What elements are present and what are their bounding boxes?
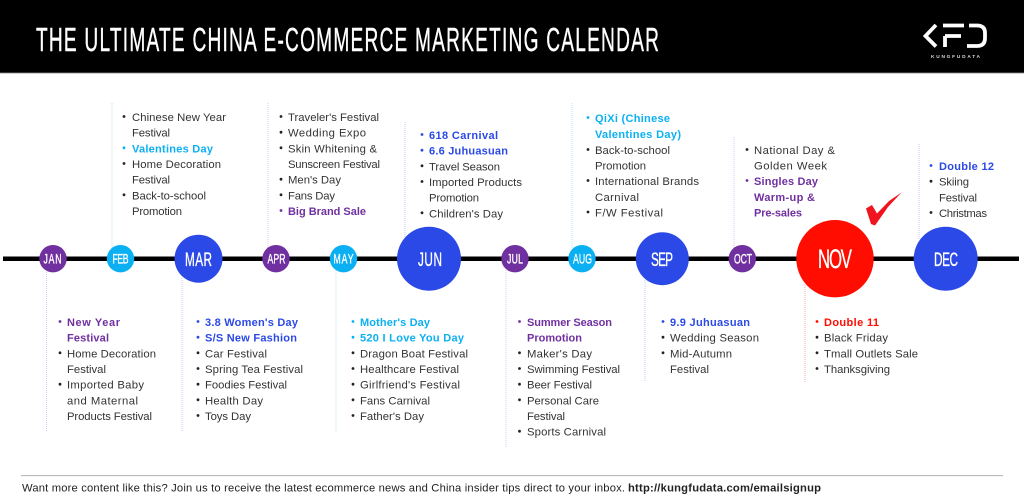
panel: July events	[506, 270, 620, 448]
panel: September events	[645, 280, 759, 382]
panel: December events: Christmas	[939, 208, 987, 220]
month marker: JUL: JUL	[507, 251, 523, 267]
panel: February events: Home Decoration	[132, 159, 221, 171]
month marker: NOV	[796, 220, 874, 297]
panel: February events: Valentines Day	[132, 143, 214, 155]
panel: January events: Festival	[67, 333, 109, 345]
panel: October events: Warm-up &	[754, 192, 815, 204]
panel: November events	[805, 285, 918, 382]
panel: March events: Health Day	[205, 395, 263, 407]
month marker: JAN: JAN	[44, 251, 61, 267]
month marker: APR	[262, 245, 290, 272]
panel: March events: Foodies Festival	[205, 380, 287, 392]
panel: December events: Festival	[939, 192, 977, 204]
panel: April events: Skin Whitening &	[288, 143, 377, 155]
panel: November events: Black Friday	[824, 333, 888, 345]
panel: August events: Back-to-school	[595, 145, 670, 157]
panel: March events: Toys Day	[205, 411, 251, 423]
panel: September events: Festival	[670, 364, 709, 376]
panel: June events: Imported Products	[429, 177, 522, 189]
panel: February events: Festival	[132, 128, 170, 140]
panel: December events: Double 12	[939, 161, 994, 173]
panel: March events: 3.8 Women's Day	[205, 317, 299, 329]
logo: KFD Kungfudata	[926, 25, 985, 60]
title: THE ULTIMATE CHINA E-COMMERCE MARKETING CALENDAR	[36, 22, 659, 58]
month marker: NOV: NOV	[818, 244, 852, 274]
logo: KFD Kungfudata: KUNGFUDATA	[931, 54, 981, 60]
panel: February events: Chinese New Year	[132, 112, 226, 124]
panel: May events: Fans Carnival	[360, 395, 430, 407]
panel: August events	[572, 103, 699, 248]
panel: May events: Mother's Day	[360, 317, 431, 329]
panel: July events: Swimming Festival	[527, 364, 620, 376]
panel: December events: Skiing	[939, 177, 969, 189]
month marker: AUG: AUG	[573, 251, 592, 267]
icon: red check mark	[866, 192, 902, 226]
panel: May events: Father's Day	[360, 411, 424, 423]
month marker: JAN	[39, 245, 67, 272]
panel: August events: International Brands	[595, 176, 699, 188]
panel: August events: Valentines Day)	[595, 129, 681, 141]
panel: June events: Promotion	[429, 193, 479, 205]
panel: July events: Beer Festival	[527, 380, 592, 392]
panel: August events: QiXi (Chinese	[595, 113, 670, 125]
panel: June events: 618 Carnival	[429, 130, 498, 142]
panel: July events: Summer Season	[527, 317, 612, 329]
timeline axis	[3, 256, 1019, 261]
panel: April events: Wedding Expo	[288, 128, 366, 140]
month marker: OCT	[729, 245, 756, 272]
panel: January events: and Maternal	[67, 395, 138, 407]
month marker: OCT: OCT	[734, 251, 752, 267]
panel: January events: Products Festival	[67, 411, 152, 423]
panel: March events	[182, 278, 303, 432]
month marker: APR: APR	[268, 251, 285, 267]
panel: April events: Fans Day	[288, 190, 335, 202]
panel: November events: Thanksgiving	[824, 364, 890, 376]
panel: March events: S/S New Fashion	[205, 333, 297, 345]
month marker: SEP	[636, 232, 689, 285]
panel: March events: Spring Tea Festival	[205, 364, 303, 376]
panel: May events	[336, 270, 468, 432]
panel: May events: Girlfriend's Festival	[360, 380, 460, 392]
footer call to action: http://kungfudata.com/emailsignup	[628, 483, 821, 495]
month marker: MAR: MAR	[185, 250, 212, 271]
panel: May events: Dragon Boat Festival	[360, 348, 468, 360]
panel: May events: Healthcare Festival	[360, 364, 459, 376]
month marker: AUG	[568, 245, 596, 272]
panel: September events: Wedding Season	[670, 333, 759, 345]
month marker: FEB: FEB	[113, 251, 129, 267]
panel: January events: Festival	[67, 364, 106, 376]
panel: June events: Children's Day	[429, 208, 503, 220]
panel: May events: 520 I Love You Day	[360, 333, 465, 345]
panel: July events: Sports Carnival	[527, 427, 606, 439]
panel: January events: New Year	[67, 317, 121, 329]
panel: February events: Promotion	[132, 206, 182, 218]
panel: July events: Promotion	[527, 333, 582, 345]
panel: July events: Personal Care	[527, 395, 599, 407]
month marker: DEC	[914, 227, 978, 291]
panel: February events: Back-to-school	[132, 190, 206, 202]
month marker: SEP: SEP	[651, 250, 673, 271]
panel: April events: Traveler's Festival	[288, 112, 379, 124]
panel: January events	[46, 272, 156, 432]
panel: July events: Maker's Day	[527, 348, 592, 360]
panel: July events: Festival	[527, 411, 565, 423]
footer divider	[21, 474, 1003, 477]
panel: August events: Carnival	[595, 192, 639, 204]
month marker: JUN	[397, 227, 461, 291]
month marker: MAY	[330, 245, 357, 272]
panel: September events: Mid-Autumn	[670, 348, 732, 360]
panel: October events: Singles Day	[754, 176, 819, 188]
panel: April events: Men's Day	[288, 175, 341, 187]
panel: September events: 9.9 Juhuasuan	[670, 317, 750, 329]
panel: April events: Sunscreen Festival	[288, 159, 380, 171]
month marker: DEC: DEC	[934, 250, 958, 271]
panel: June events: Travel Season	[429, 161, 500, 173]
panel: June events	[405, 122, 522, 240]
panel: October events	[734, 137, 835, 248]
panel: April events: Big Brand Sale	[288, 206, 366, 218]
panel: October events: National Day &	[754, 145, 835, 157]
month marker: JUN: JUN	[418, 250, 442, 271]
panel: December events	[919, 144, 994, 240]
panel: April events	[268, 103, 380, 248]
panel: October events: Golden Week	[754, 160, 827, 172]
month marker: FEB	[107, 245, 134, 272]
panel: October events: Pre-sales	[754, 208, 802, 220]
panel: February events	[112, 103, 226, 248]
panel: August events: Promotion	[595, 160, 646, 172]
panel: January events: Imported Baby	[67, 380, 144, 392]
panel: June events: 6.6 Juhuasuan	[429, 146, 508, 158]
month marker: JUL	[501, 245, 529, 272]
panel: August events: F/W Festival	[595, 208, 663, 220]
panel: March events: Car Festival	[205, 348, 267, 360]
month marker: MAY: MAY	[333, 251, 354, 267]
panel: January events: Home Decoration	[67, 348, 156, 360]
header band	[0, 0, 1024, 73]
panel: February events: Festival	[132, 175, 170, 187]
panel: November events: Double 11	[824, 317, 879, 329]
panel: November events: Tmall Outlets Sale	[824, 348, 918, 360]
month marker: MAR	[174, 235, 222, 283]
footer call to action: Want more content like this? Join us to receive the latest ecommerce news and China insider tips direct to your inbox.	[22, 483, 625, 495]
